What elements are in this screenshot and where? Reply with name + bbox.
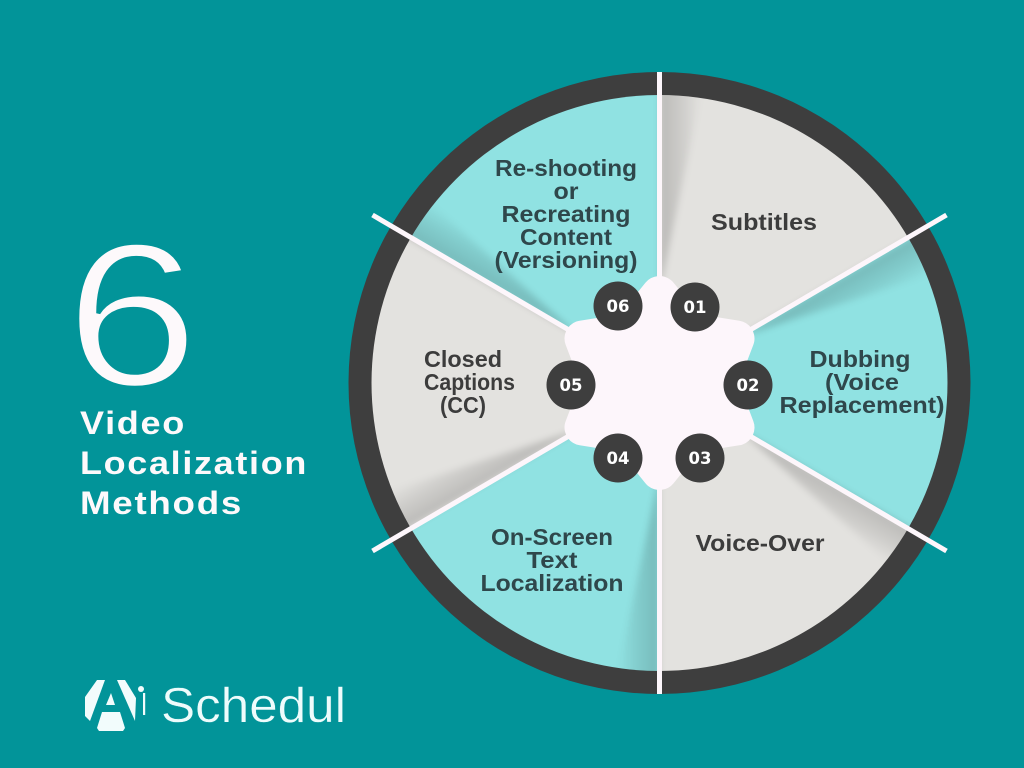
badge 06: 06 xyxy=(607,297,629,316)
label: On-Screen Text Localization: On-Screen xyxy=(491,524,613,550)
badge 02 xyxy=(724,360,772,410)
badge 01: 01 xyxy=(684,298,706,317)
heading: Video Localization Methods xyxy=(80,405,308,521)
big number 6: 6 xyxy=(65,202,199,430)
icon: logo mark xyxy=(85,680,145,731)
badge 05: 05 xyxy=(560,376,582,395)
logo: Ai Schedul xyxy=(85,679,346,733)
logo wordmark: Schedul xyxy=(161,679,346,733)
badge 06 xyxy=(594,282,642,330)
label: On-Screen Text Localization xyxy=(480,524,624,596)
segment 04 xyxy=(410,383,660,671)
label: On-Screen Text Localization: Localization xyxy=(480,570,624,596)
heading: Video Localization Methods: Localization xyxy=(80,445,308,481)
label: Re-shooting or Recreating Content (Versioning): or xyxy=(554,178,579,204)
label: Re-shooting or Recreating Content (Versioning) xyxy=(494,155,638,273)
label: Dubbing (Voice Replacement): (Voice xyxy=(825,369,899,395)
heading: Video Localization Methods: Video xyxy=(80,405,186,441)
label: Dubbing (Voice Replacement): Replacement) xyxy=(780,392,944,418)
spoke shadows xyxy=(378,83,941,683)
spokes xyxy=(372,72,946,694)
label: Closed Captions (CC): Closed xyxy=(424,346,502,372)
label: Closed Captions (CC): (CC) xyxy=(440,392,486,418)
label: Re-shooting or Recreating Content (Versioning): Content xyxy=(520,224,612,250)
segment 03 xyxy=(660,383,909,671)
badge 04: 04 xyxy=(607,449,629,468)
badge 05 xyxy=(546,360,596,410)
label: Re-shooting or Recreating Content (Versioning): (Versioning) xyxy=(494,247,638,273)
label: On-Screen Text Localization: Text xyxy=(526,547,578,573)
badge 01 xyxy=(670,282,720,332)
segment 05 xyxy=(372,239,660,527)
label: Voice-Over: Voice-Over xyxy=(696,530,825,556)
badge 02: 02 xyxy=(737,376,759,395)
badge 03 xyxy=(676,434,724,482)
segment 02 xyxy=(660,239,947,527)
outer ring xyxy=(348,72,970,694)
label: Closed Captions (CC) xyxy=(424,346,515,418)
label: Dubbing (Voice Replacement) xyxy=(780,346,944,418)
centre hub xyxy=(582,294,736,472)
label: Re-shooting or Recreating Content (Versioning): Recreating xyxy=(502,201,630,227)
badge 03: 03 xyxy=(689,449,711,468)
label: Dubbing (Voice Replacement): Dubbing xyxy=(810,346,910,372)
label: Re-shooting or Recreating Content (Versioning): Re-shooting xyxy=(495,155,637,181)
label: Closed Captions (CC): Captions xyxy=(424,369,515,395)
segment 06 xyxy=(410,95,660,383)
wheel diagram xyxy=(348,72,970,694)
segment 01 xyxy=(660,95,909,383)
heading: Video Localization Methods: Methods xyxy=(80,485,243,521)
label: Subtitles: Subtitles xyxy=(711,209,817,235)
badge 04 xyxy=(594,434,642,482)
